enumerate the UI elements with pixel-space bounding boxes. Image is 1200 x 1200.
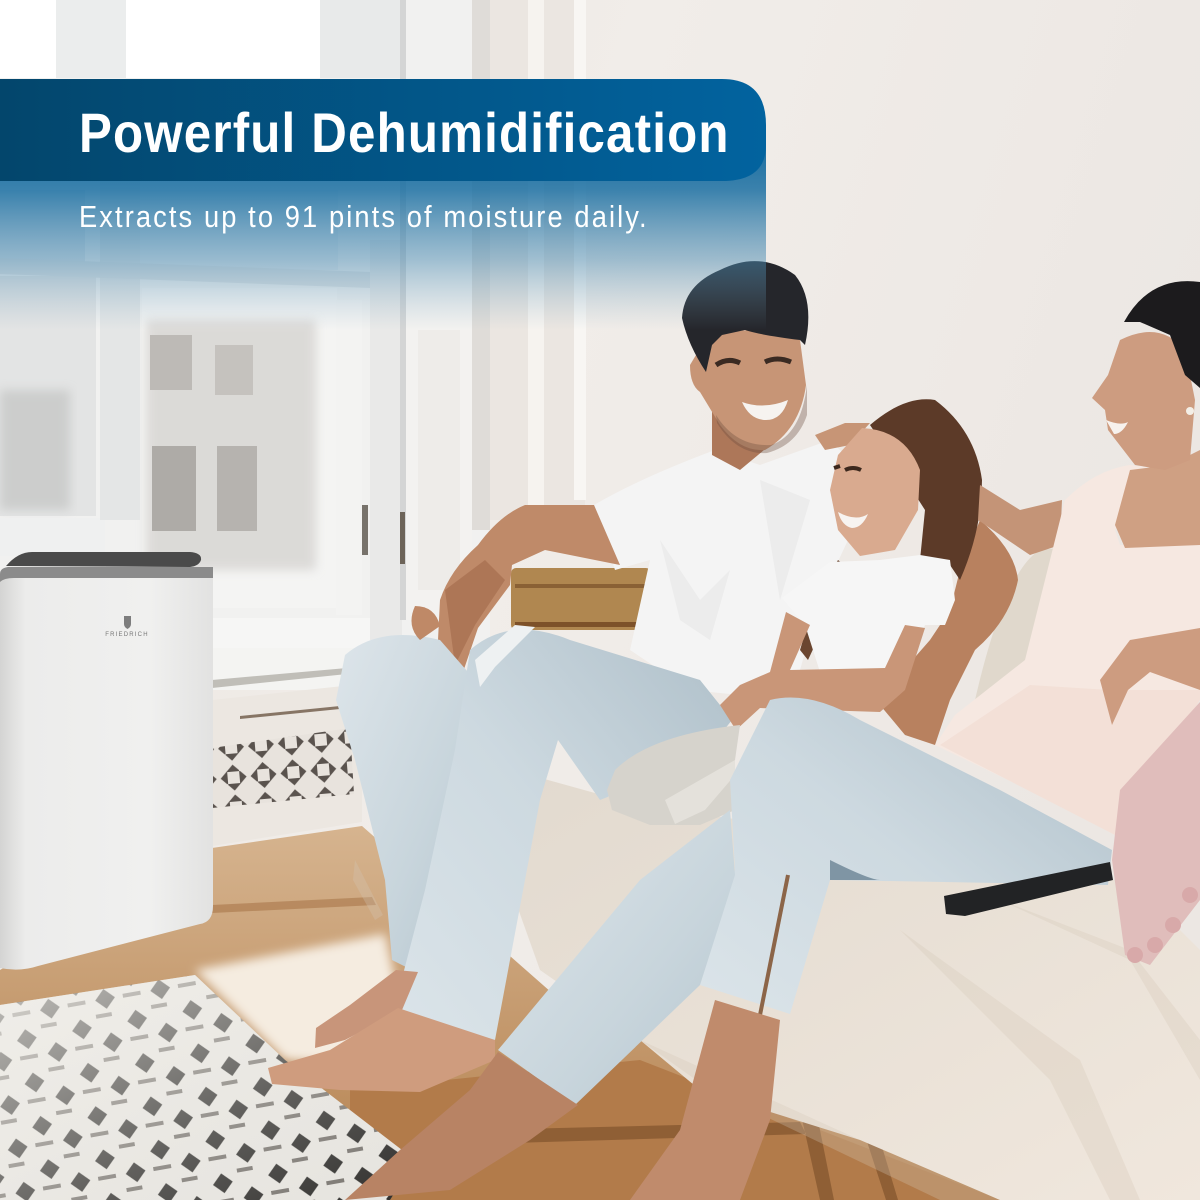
window: [0, 0, 490, 660]
legs: [607, 725, 740, 825]
face: [830, 428, 920, 556]
hair: [870, 399, 982, 580]
title banner: [0, 79, 766, 181]
chest: [1115, 450, 1200, 548]
radiator cover: [212, 648, 392, 846]
dehumidifier: [0, 552, 213, 972]
sofa with throw: [353, 548, 1200, 1200]
person: girl: [607, 399, 982, 825]
face: [690, 330, 806, 450]
arm around girl: [880, 520, 1018, 745]
icon: brand shield: [124, 616, 131, 629]
face and neck: [1092, 332, 1195, 470]
person: man: [268, 261, 1018, 1092]
floor: [0, 826, 1000, 1200]
feet and legs: [345, 1052, 578, 1200]
jeans: [700, 698, 1112, 1014]
arm: [720, 612, 925, 730]
title: Powerful Dehumidification: [79, 102, 728, 165]
hand: [1100, 628, 1200, 725]
shirt: [782, 555, 955, 672]
arm: [438, 505, 620, 675]
pillow: [1112, 702, 1200, 965]
gradient fade panel: [0, 130, 766, 330]
hair: [1124, 281, 1200, 388]
subtitle: Extracts up to 91 pints of moisture daily.: [79, 200, 647, 234]
brand label: FRIEDRICH: [105, 632, 149, 638]
arm behind: [978, 485, 1062, 555]
person: woman: [345, 281, 1200, 1200]
top: [935, 465, 1200, 835]
far leg: [336, 635, 475, 970]
remote control: [944, 862, 1113, 916]
feet: [315, 970, 418, 1048]
shirt: [594, 440, 860, 695]
hair: [682, 261, 808, 372]
rug: [0, 975, 415, 1200]
neck: [712, 410, 770, 470]
near leg: [395, 630, 732, 1040]
